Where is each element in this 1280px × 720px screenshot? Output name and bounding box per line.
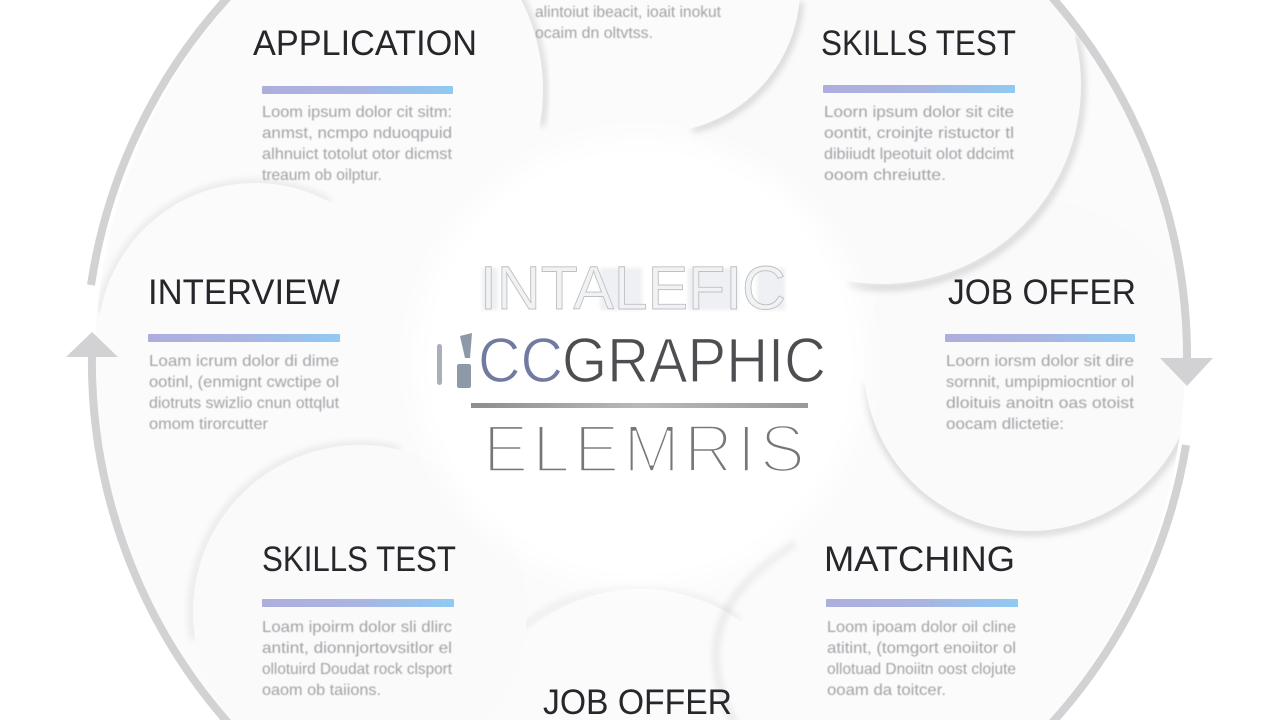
accent bar [262,599,454,607]
body text: ootinl, (enmignt cwctipe ol [149,374,339,391]
icon: glitch mark [437,333,472,388]
heading: skills test: SKILLS TEST [262,540,456,579]
title line: graphic: CC [478,326,563,396]
petal: matching [716,543,795,720]
panel: skills test top right [821,24,1016,184]
heading: matching: MATCHING [824,540,1015,579]
petal: skills test bottom left [188,441,398,638]
body text [262,619,453,699]
petal: job offer right [863,385,1180,538]
body text: Loam ipoirm dolor sli dlirc [262,619,452,636]
heading: interview: INTERVIEW [148,273,340,312]
accent bar [823,85,1015,93]
body text: Loorn iorsm dolor sit dire [946,353,1134,370]
center white circle [414,136,866,588]
body text [149,353,340,433]
title line: elements: ELEMRIS [483,411,805,487]
panel: job offer right [945,273,1136,433]
petal: job offer bottom [526,598,736,626]
body text: omom tirorcutter [149,416,269,433]
accent bar [148,334,340,342]
body text: ooam da toitcer. [827,682,946,699]
body text: oocam dlictetie: [946,416,1064,433]
panel: interview [148,273,340,433]
panel: skills test bottom left [262,540,456,699]
panel: application [253,24,477,184]
petal: skills test top right [850,34,1088,293]
accent bar [262,86,453,94]
heading: skills test: SKILLS TEST [821,24,1016,63]
accent bar [826,599,1018,607]
body text: ollotuad Dnoiitn oost clojute [827,661,1016,678]
body text: oaom ob taiions. [262,682,381,699]
panel: matching [824,540,1018,699]
body text: atitint, (tomgort enoiitor ol [827,640,1016,657]
body text [262,104,453,184]
heading: job offer: JOB OFFER [948,273,1136,312]
body text: anmst, ncmpo nduoqpuid [262,125,452,142]
title rule [471,403,808,408]
center title [437,254,826,487]
title line: faded top word: INTALEFIC [480,254,786,322]
petal: top center [692,0,805,134]
text block: top center fragment [535,4,722,42]
body text: Loorn ipsum dolor sit cite [824,104,1014,121]
text block: top center fragment: ocaim dn oltvtss. [535,25,653,42]
body text: Loom ipsum dolor cit sitm: [262,104,452,121]
petal: application [522,0,550,127]
body text: ollotuird Doudat rock clsport [262,661,453,678]
body text [824,104,1015,184]
body text [827,619,1016,699]
text block: top center fragment: alintoiut ibeacit, ioait inokut [535,4,722,21]
body text [946,353,1135,433]
body text: Loom ipoam dolor oil cline [827,619,1016,636]
accent bar [945,334,1135,342]
petal: interview [98,179,329,310]
body text: treaum ob oilptur. [262,167,382,184]
heading: application: APPLICATION [253,24,477,63]
body text: Loam icrum dolor di dime [149,353,339,370]
body text: ooom chreiutte. [824,167,946,184]
ghost blocks behind faded title [482,268,785,310]
body text: antint, dionnjortovsitlor el [262,640,452,657]
body text: sornnit, umpipmiocntior ol [946,374,1134,391]
body text: alhnuict totolut otor dicmst [262,146,453,163]
body text: oontit, croinjte ristuctor tl [824,125,1014,142]
body text: diotruts swizlio cnun ottqlut [149,395,340,412]
title line: graphic: GRAPHIC [562,326,826,396]
body text: dloituis anoitn oas otoist [946,395,1135,412]
body text: dibiiudt lpeotuit olot ddcimt [824,146,1015,163]
